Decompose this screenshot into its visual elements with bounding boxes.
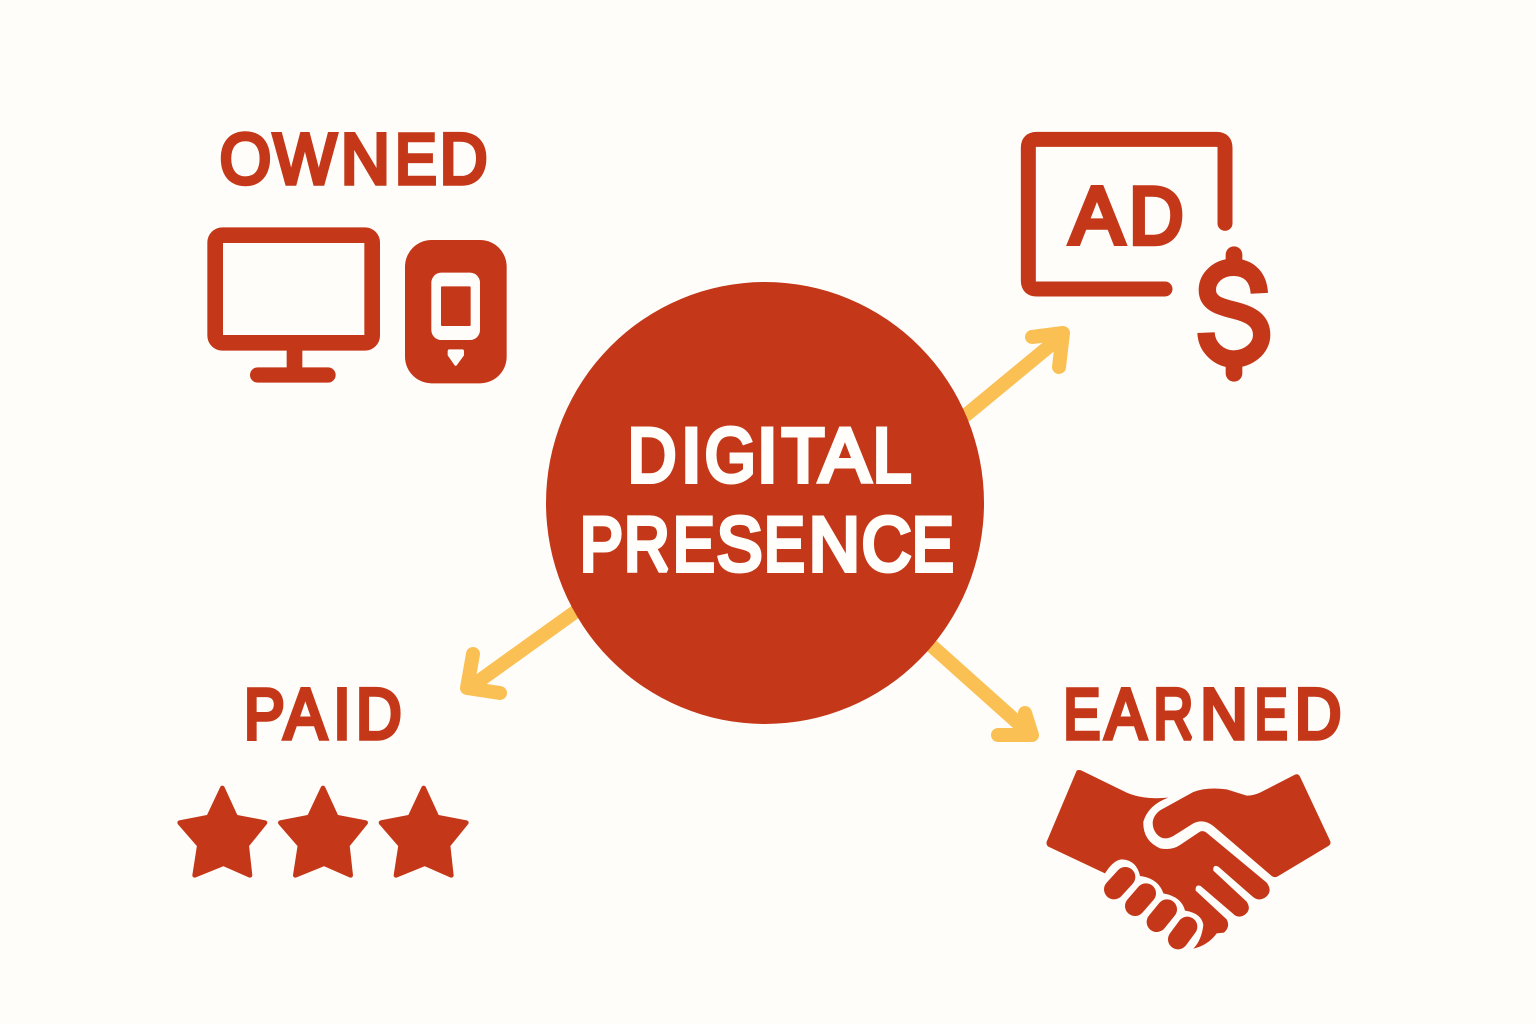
icon: desktop monitor <box>215 235 372 383</box>
star 3 <box>381 788 466 875</box>
heading: earned: D <box>1295 676 1341 754</box>
title: digital presence: E <box>673 502 715 588</box>
heading: paid: A <box>284 676 327 754</box>
heading: earned: R <box>1153 676 1193 754</box>
ad text: A <box>1070 171 1124 261</box>
title: digital presence: A <box>820 414 870 498</box>
title: digital presence: I <box>681 414 702 498</box>
heading: owned: E <box>395 120 437 200</box>
central circle <box>546 282 984 724</box>
star 2 <box>280 788 366 875</box>
star 1 <box>180 788 265 875</box>
icon: three stars <box>180 788 466 875</box>
icon: ad frame with dollar sign <box>1028 139 1262 373</box>
heading: earned: E <box>1063 676 1100 754</box>
ad text: D <box>1129 171 1183 261</box>
arrow: to paid <box>467 612 575 693</box>
title: digital presence <box>580 414 954 588</box>
heading: paid: I <box>333 676 351 754</box>
title: digital presence: I <box>757 414 778 498</box>
title: digital presence: E <box>912 502 954 588</box>
heading: earned: E <box>1255 676 1288 754</box>
title: digital presence: L <box>873 414 911 498</box>
title: digital presence: S <box>717 502 762 588</box>
heading: owned: W <box>273 120 336 200</box>
fingers <box>1114 877 1187 939</box>
heading: owned: D <box>440 120 488 200</box>
icon: handshake <box>1046 770 1331 949</box>
heading: paid: D <box>356 676 402 754</box>
heading: paid: P <box>244 676 285 754</box>
title: digital presence: R <box>624 502 670 588</box>
title: digital presence: D <box>628 414 676 498</box>
ad frame <box>1028 139 1225 289</box>
title: digital presence: P <box>580 502 623 588</box>
heading: earned: A <box>1105 676 1147 754</box>
title: digital presence: C <box>862 502 911 588</box>
arrow: to earned <box>933 647 1032 735</box>
heading: owned: N <box>341 120 390 200</box>
icon: mobile phone <box>405 240 507 383</box>
right hand <box>1153 774 1331 877</box>
title: digital presence: E <box>764 502 805 588</box>
heading: earned: N <box>1200 676 1248 754</box>
title: digital presence: G <box>705 414 756 498</box>
dollar sign <box>1206 255 1262 373</box>
title: digital presence: N <box>809 502 860 588</box>
arrow: to ad (paid media) <box>966 333 1063 415</box>
heading: owned: O <box>220 120 271 200</box>
title: digital presence: T <box>782 414 824 498</box>
left hand <box>1046 770 1270 949</box>
